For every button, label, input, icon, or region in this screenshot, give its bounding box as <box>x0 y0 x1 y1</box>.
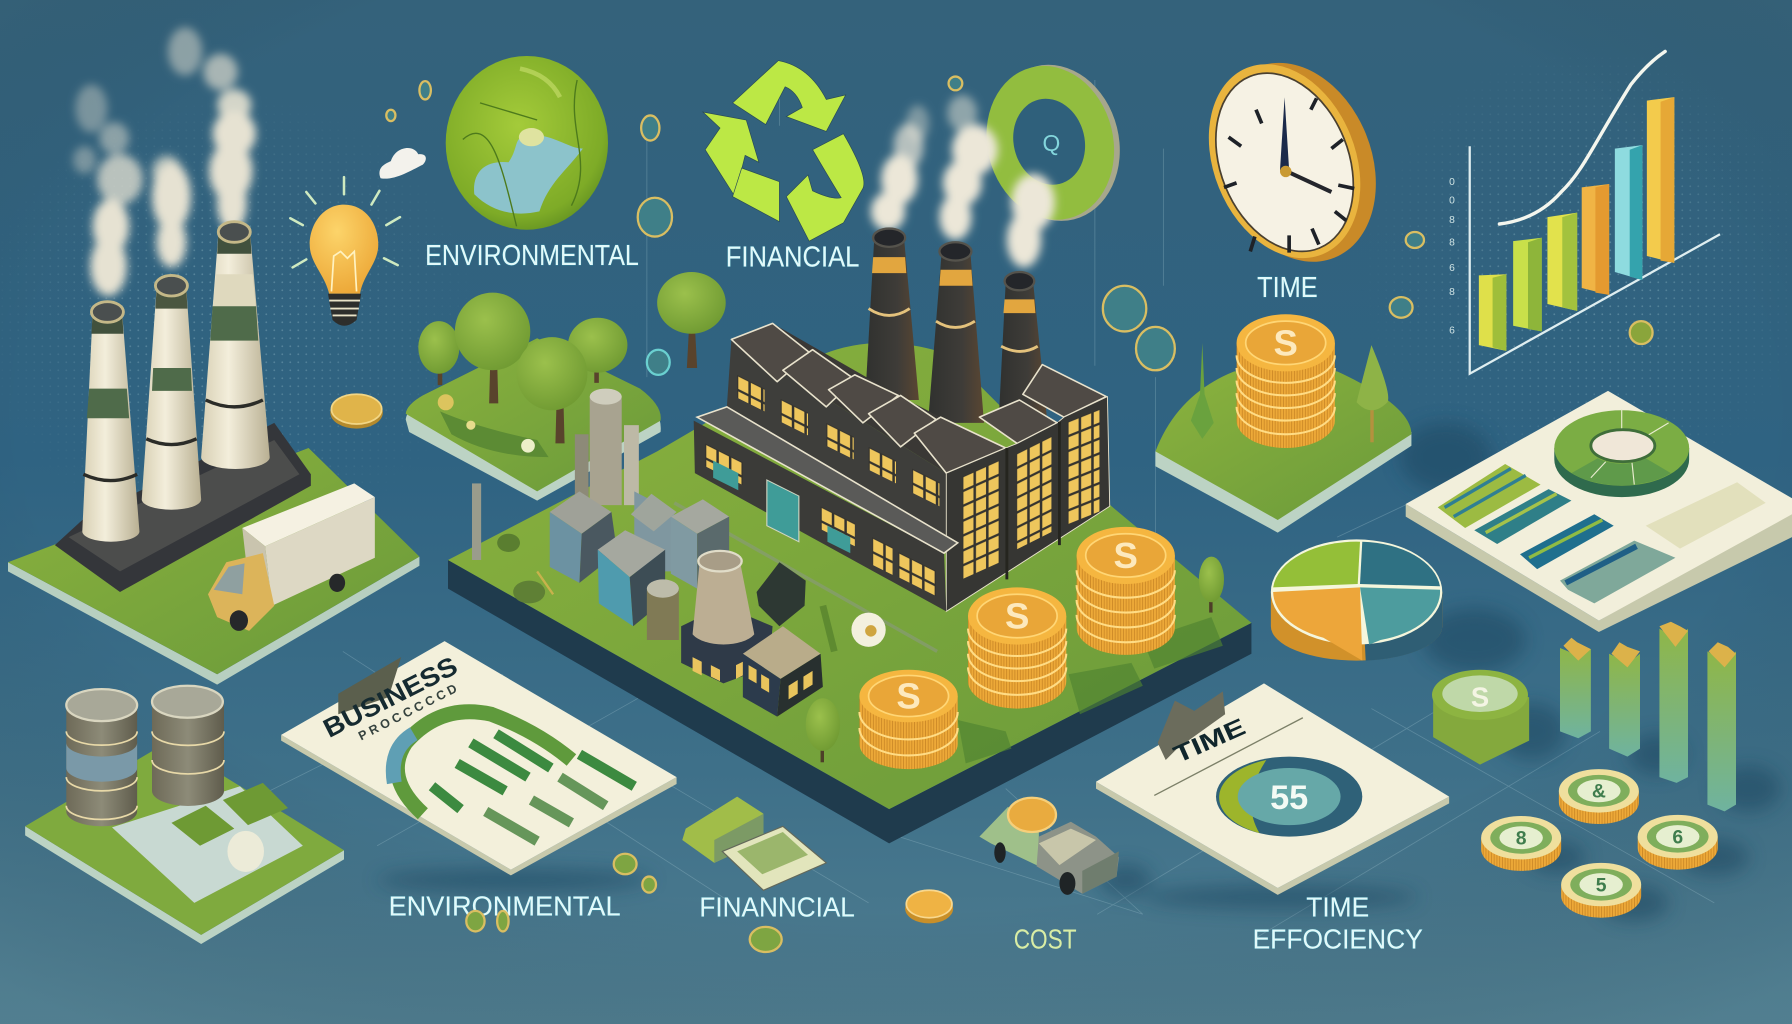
coin stack <box>1237 314 1335 448</box>
panel: tree island <box>406 293 661 501</box>
roof backing <box>731 323 1006 473</box>
right wall <box>946 397 1110 611</box>
coin: 5 <box>1596 874 1607 896</box>
shrubs <box>497 534 553 603</box>
small medallion icons <box>386 77 1653 952</box>
tree <box>1357 345 1388 442</box>
title: TIME <box>1170 714 1250 769</box>
icon: coin <box>905 890 953 923</box>
subtitle: PROCCCCCD <box>356 681 459 743</box>
coin: 6 <box>1672 826 1683 848</box>
clip <box>1158 691 1225 760</box>
paper <box>1406 504 1792 632</box>
lower wall <box>694 421 946 611</box>
stack pipes <box>575 389 639 505</box>
trend line <box>1499 51 1665 224</box>
coin stack 3: S <box>896 676 921 717</box>
tree <box>806 698 840 762</box>
factory building <box>694 323 1110 611</box>
can 1 <box>66 689 137 826</box>
green bars <box>432 734 634 809</box>
icon: green capsule <box>1432 670 1529 765</box>
label: environmental: ENVIRONMENTAL <box>389 890 621 921</box>
delivery truck <box>208 483 375 631</box>
coin: 8 <box>1516 828 1527 850</box>
heading: environmental: ENVIRONMENTAL <box>425 240 639 272</box>
map thumbnail <box>1646 482 1766 549</box>
axis ticks: 8 <box>1449 238 1455 249</box>
bars <box>1479 97 1674 351</box>
label: cost: COST <box>1014 924 1077 955</box>
block A <box>550 491 617 583</box>
sawtooth roof <box>731 323 1106 473</box>
report: donut and stripes <box>1406 391 1792 632</box>
axis ticks: 6 <box>1449 263 1455 274</box>
block C <box>631 491 677 571</box>
block B <box>598 530 665 626</box>
chimney 1 <box>82 302 139 542</box>
icon: light bulb <box>290 177 400 326</box>
icon: green box and banknote <box>682 797 826 890</box>
paper <box>1096 782 1449 895</box>
coin stack 2 <box>968 587 1066 709</box>
tall windows <box>962 409 1099 579</box>
heading: financial: FINANCIAL <box>726 241 859 273</box>
axis ticks: 6 <box>1449 326 1455 337</box>
label: financial: FINANNCIAL <box>699 892 855 923</box>
chimney 2 <box>142 275 201 510</box>
platform <box>25 742 344 944</box>
clip <box>338 657 401 714</box>
axis ticks: 8 <box>1449 215 1455 226</box>
title: BUSINESS <box>318 650 462 744</box>
icon: cloud <box>379 148 426 179</box>
label: efficiency: EFFOCIENCY <box>1253 924 1423 955</box>
island ground <box>1155 371 1411 533</box>
coin stack 1 <box>1077 527 1175 655</box>
icon: gold coin <box>330 394 383 429</box>
coin stack 3 <box>859 670 958 769</box>
coin stack 2: S <box>1005 596 1029 637</box>
chimney 3 <box>201 222 270 469</box>
rule <box>1154 718 1303 795</box>
icon: medal coins <box>1481 769 1718 918</box>
coin: & <box>1592 781 1606 803</box>
pole <box>472 483 481 560</box>
arc <box>397 712 571 814</box>
report: time <box>1096 683 1449 895</box>
bar group: green columns <box>1560 622 1736 811</box>
panel: central factory island <box>448 95 1251 843</box>
island ground <box>448 343 1251 843</box>
gauge: 55 <box>1270 779 1308 817</box>
heading: time: TIME <box>1257 272 1318 304</box>
factory chimneys <box>865 229 1047 423</box>
smoke plumes <box>871 95 998 240</box>
icon: coin cans <box>25 686 344 944</box>
axis ticks: 8 <box>1449 287 1455 298</box>
icon: green capsule: S <box>1471 681 1489 712</box>
ground shadows <box>377 423 1781 921</box>
flower <box>823 606 886 651</box>
block D <box>671 499 729 589</box>
label: time: TIME <box>1306 892 1369 923</box>
coin stack: S <box>1274 322 1298 363</box>
icon: clock <box>1181 39 1404 286</box>
coin <box>1559 769 1639 824</box>
small house <box>743 626 823 717</box>
report: business <box>281 641 677 875</box>
coin <box>1561 863 1641 918</box>
can 2 <box>152 686 224 806</box>
axes <box>1470 146 1720 374</box>
icon: lone tree <box>657 272 726 368</box>
panel: left chimneys platform <box>8 27 419 685</box>
paper <box>281 735 677 875</box>
donut <box>1554 409 1689 497</box>
tree <box>1199 557 1224 613</box>
coin stack 1: S <box>1114 535 1138 576</box>
pie chart <box>1271 539 1442 661</box>
roof strip <box>697 407 958 553</box>
stripes <box>1438 464 1675 603</box>
icon: green ring: Q <box>1043 130 1060 156</box>
gauge <box>1216 757 1362 837</box>
small tank <box>647 579 679 640</box>
panel: time island <box>1155 314 1411 533</box>
axis ticks: 0 <box>1449 195 1455 206</box>
island ground <box>406 343 661 501</box>
doors <box>713 461 850 553</box>
axis ticks <box>1449 177 1455 337</box>
icon: green ring <box>970 51 1136 235</box>
small factory cluster <box>472 389 1224 762</box>
platform base <box>8 423 419 685</box>
cooling tower building <box>681 551 773 683</box>
upper windows <box>705 375 939 596</box>
icon: recycling symbol <box>703 61 864 241</box>
icon: pickup truck with coin <box>979 798 1119 895</box>
axis ticks: 0 <box>1449 177 1455 188</box>
trees <box>418 293 627 443</box>
dark block <box>757 562 806 626</box>
icon: green globe <box>446 56 608 230</box>
sprout <box>1191 343 1214 439</box>
upper wall <box>727 339 958 543</box>
coin <box>1638 815 1718 870</box>
smoke plumes <box>73 27 256 296</box>
bar chart: rising bars <box>1449 51 1720 374</box>
coin <box>1481 816 1561 871</box>
